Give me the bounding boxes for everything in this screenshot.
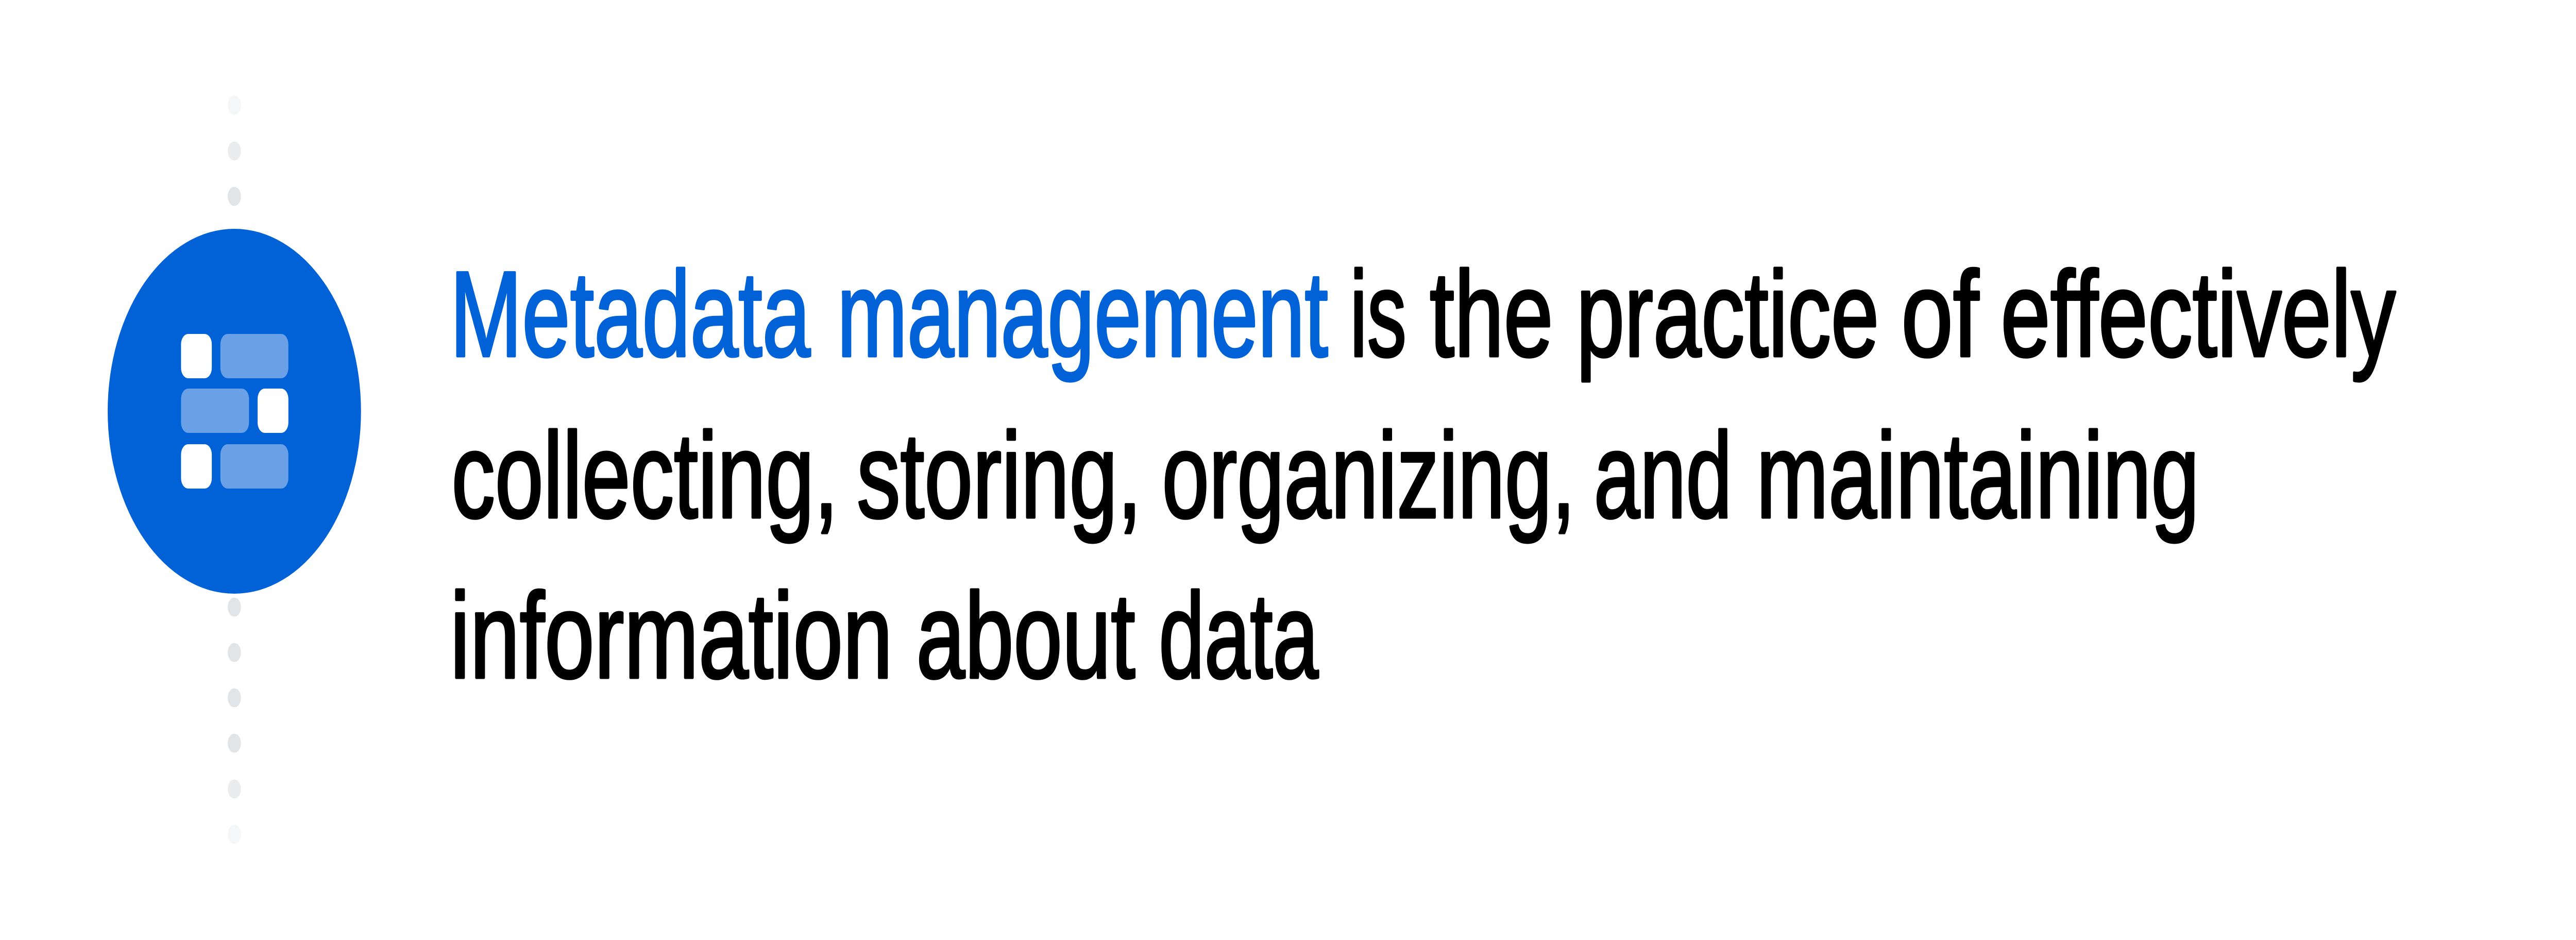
- definition text block: [450, 246, 2396, 704]
- line 1: highlighted term and definition start: [450, 246, 2396, 382]
- line 1: highlighted term and definition start: the: [1430, 246, 1553, 382]
- line 3 of definition: [450, 568, 1318, 704]
- line 2 of definition: [451, 408, 2199, 544]
- line 1: highlighted term and definition start: practice: [1577, 246, 1879, 382]
- line 2 of definition: storing,: [857, 408, 1142, 544]
- icon: blue circle badge with metadata blocks: [108, 229, 361, 594]
- line 2 of definition: maintaining: [1756, 408, 2199, 544]
- line 2 of definition: collecting,: [451, 408, 838, 544]
- line 3 of definition: about: [916, 568, 1135, 704]
- line 1: highlighted term and definition start: Metadata: [450, 246, 810, 382]
- line 2 of definition: and: [1594, 408, 1732, 544]
- line 2 of definition: organizing,: [1162, 408, 1575, 544]
- line 1: highlighted term and definition start: is: [1350, 246, 1406, 382]
- line 1: highlighted term and definition start: of: [1901, 246, 1979, 382]
- line 1: highlighted term and definition start: effectively: [2001, 246, 2396, 382]
- dotted line above circle: [228, 96, 241, 206]
- line 1: highlighted term and definition start: management: [837, 246, 1328, 382]
- line 3 of definition: data: [1159, 568, 1318, 704]
- line 3 of definition: information: [450, 568, 893, 704]
- dotted line below circle: [228, 598, 241, 844]
